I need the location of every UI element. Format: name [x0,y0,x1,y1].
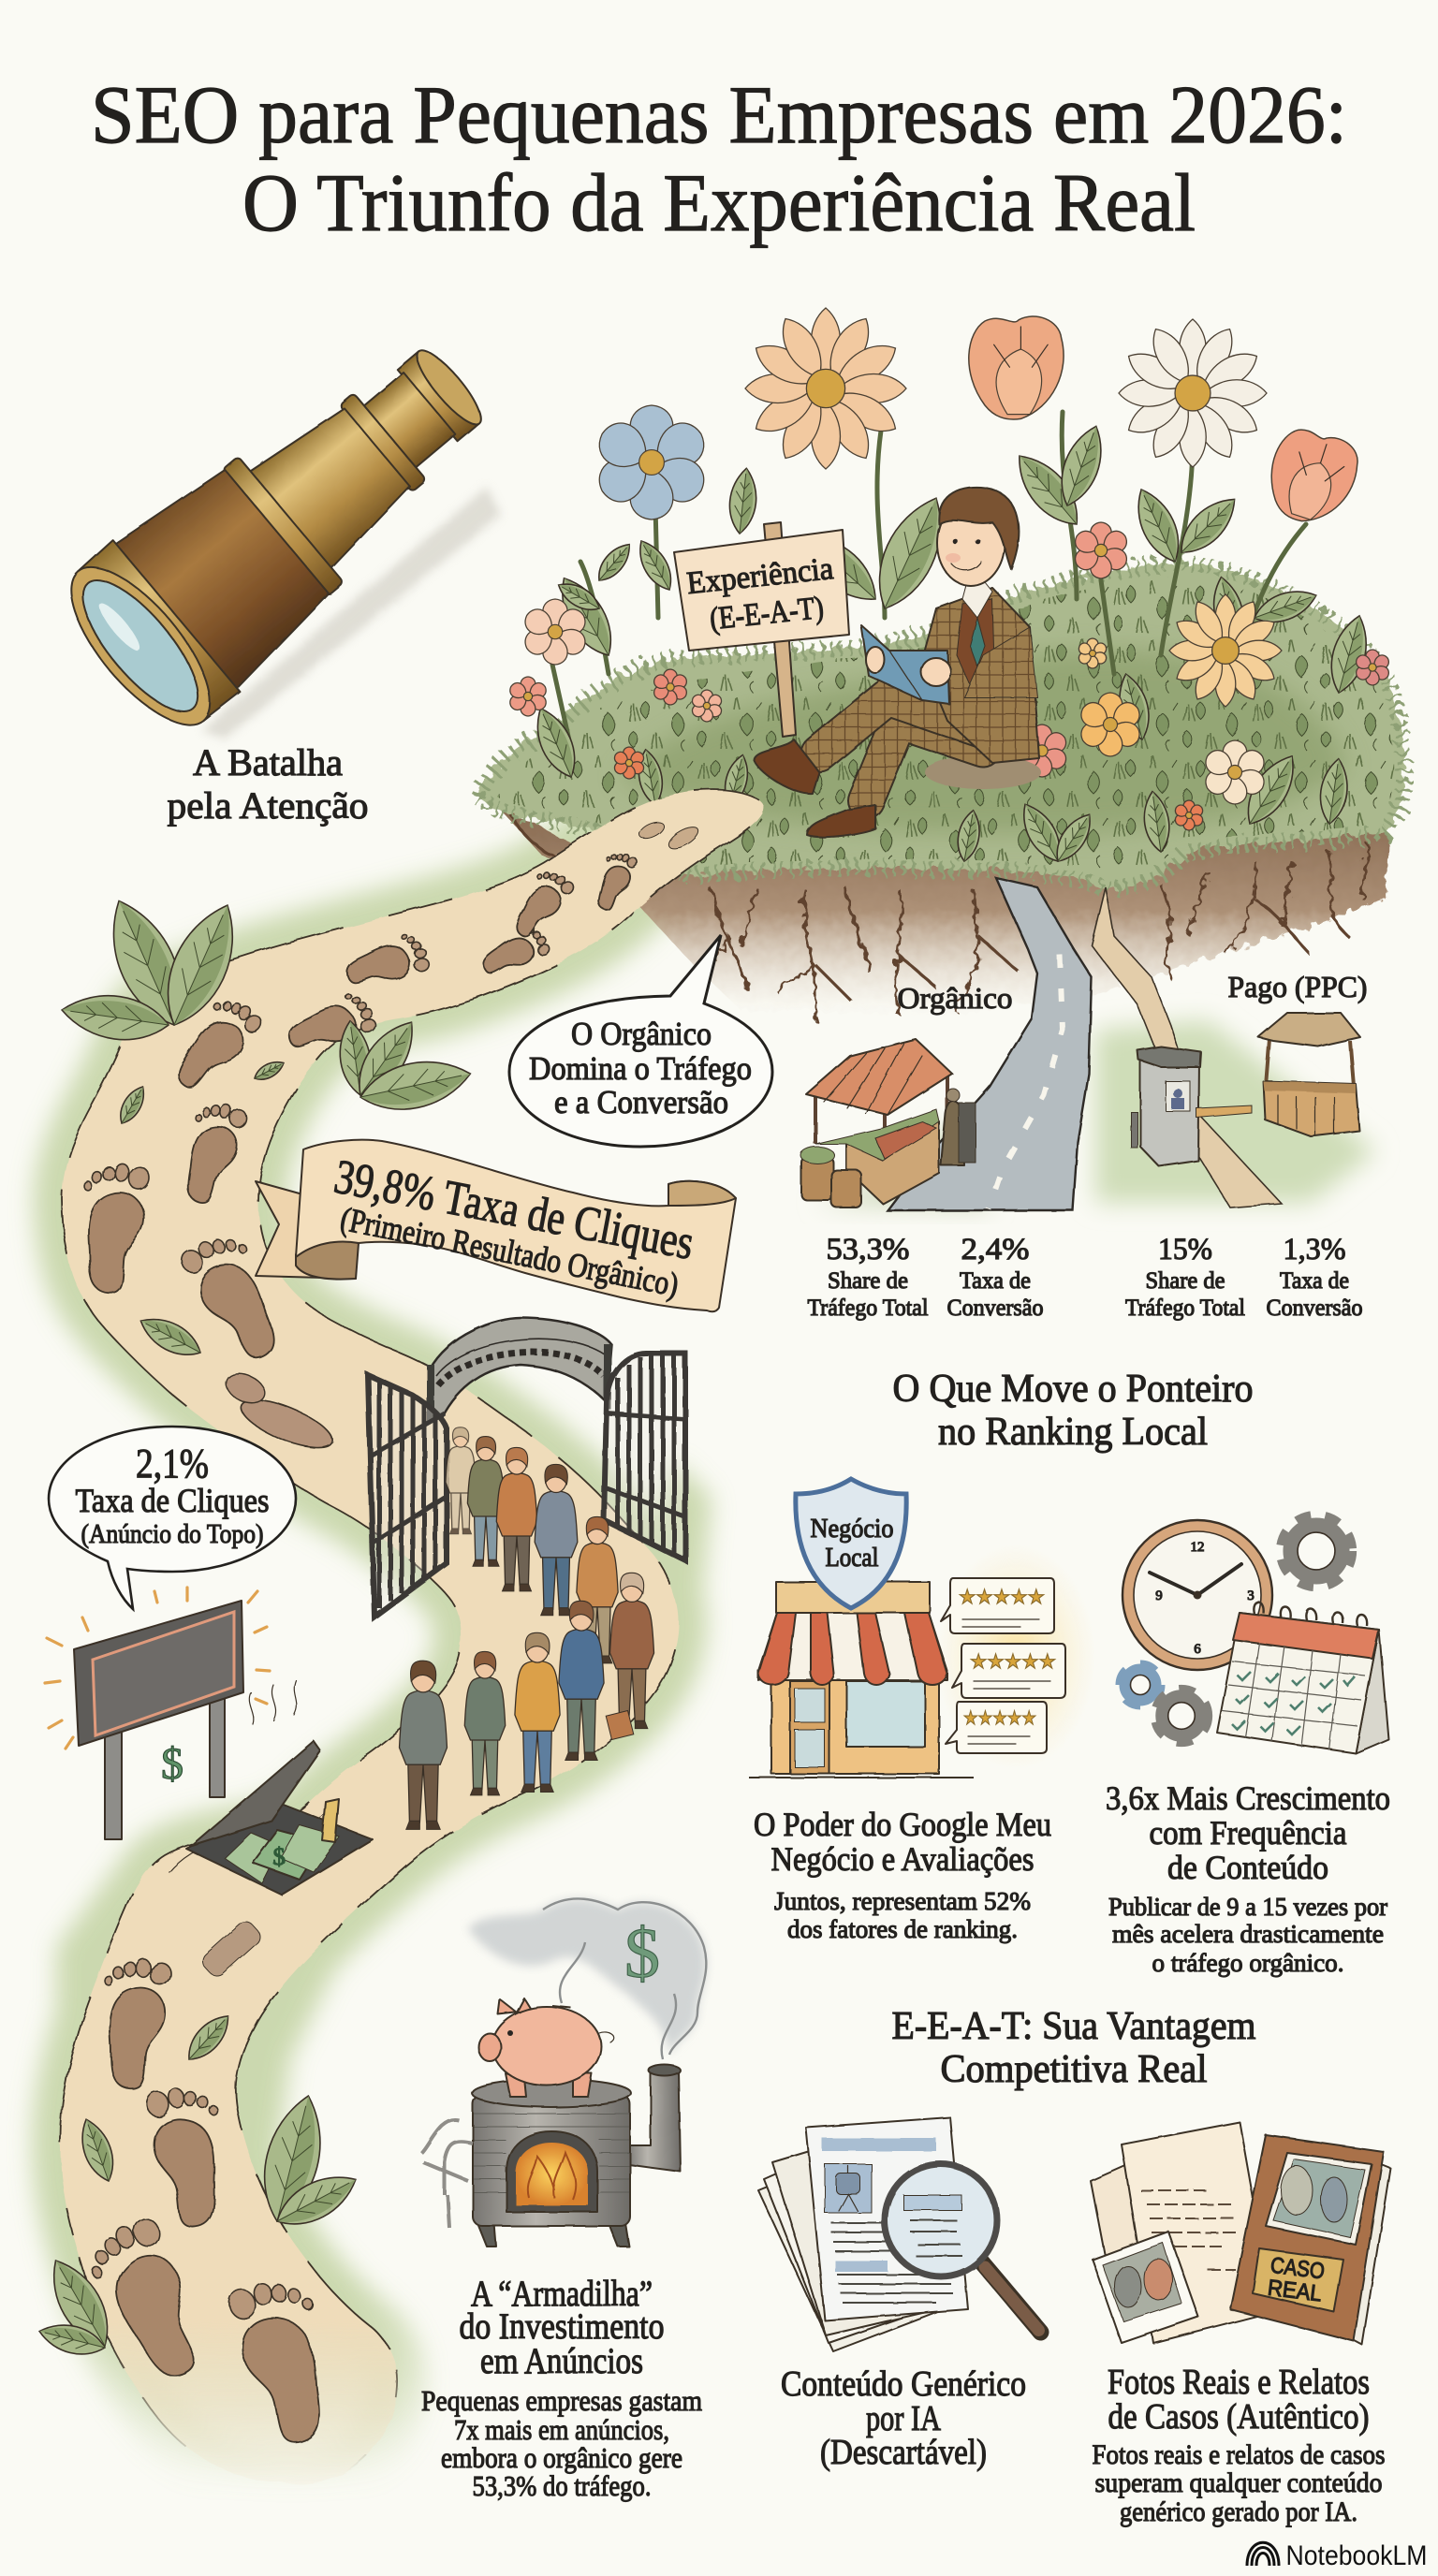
stat: 15%: 15% [1158,1233,1212,1266]
flowers [507,308,1391,830]
text: A "Armadilha" do Investimento: em Anúncios [480,2341,643,2381]
piggy bank [478,1998,614,2097]
stat: 2,4%: Conversão [947,1295,1043,1321]
text: Conteúdo Genérico por IA: (Descartável) [820,2433,987,2472]
ribbon banner: 39,8% [256,1140,736,1311]
heading: E-E-A-T [891,2005,1256,2091]
heading: O Que Move o Ponteiro: O Que Move o Ponteiro [893,1368,1253,1411]
heading: O Que Move o Ponteiro [893,1368,1253,1454]
stat: 53,3%: Share de [828,1268,908,1294]
text: O Poder do Google Meu: dos fatores de ranking. [787,1915,1018,1943]
icon: dollar in smoke: $ [624,1914,660,1993]
queue of people [400,1427,654,1829]
road comparison scene: organic vs paid [800,878,1376,1321]
plate text: CASO REAL [1266,2253,1326,2306]
text: Fotos Reais e Relatos [1092,2363,1386,2527]
text: O Poder do Google Meu [754,1806,1051,1943]
toll booth and barrier [1131,1046,1252,1166]
calendar [1217,1603,1388,1753]
clock: 6 [1194,1642,1201,1657]
soil and roots [496,805,1387,1020]
flowering hill with soil and roots [477,308,1404,1020]
text: 3,6x Mais Crescimento: mês acelera drasticamente [1112,1920,1384,1948]
clock [1123,1520,1272,1670]
text: A "Armadilha" do Investimento: do Investimento [459,2306,665,2347]
text: A "Armadilha" do Investimento: 7x mais em anúncios, [454,2413,669,2446]
review bubbles [941,1578,1065,1753]
text: Conteúdo Genérico por IA: Conteúdo Genérico [781,2364,1026,2404]
text: Fotos Reais e Relatos: superam qualquer conteúdo [1095,2467,1382,2498]
market stall [800,1039,976,1208]
clock: 12 [1191,1540,1204,1555]
text: A Batalha pela Atenção: pela Atenção [167,784,369,827]
speech bubble: 2,1% Taxa de Cliques: Taxa de Cliques [75,1482,270,1519]
text: A "Armadilha" do Investimento [421,2274,702,2502]
stat: 15%: Share de [1146,1268,1225,1294]
plate text: CASO REAL: CASO [1269,2253,1326,2284]
heading: E-E-A-T: E-E-A-T: Sua Vantagem [891,2005,1256,2048]
speech bubble: 2,1% Taxa de Cliques [49,1427,296,1609]
telescope illustration [47,302,522,747]
title [91,70,1347,249]
stat: 1,3% [1266,1233,1363,1321]
wooden stall [1258,1013,1360,1136]
ribbon banner: 39,8%: 39,8% Taxa de Cliques [330,1150,697,1270]
right door [604,1354,685,1560]
signpost: Experiência (E-E-A-T): (E-E-A-T) [708,591,826,637]
heading: O Que Move o Ponteiro: no Ranking Local [938,1411,1208,1454]
stat: 15% [1125,1233,1245,1321]
review bubbles: ★★★★★ [963,1708,1036,1729]
documents with magnifying glass [758,2117,1041,2351]
local shop with shield and reviews: Local [826,1544,879,1573]
text: A "Armadilha" do Investimento: embora o orgânico gere [441,2441,682,2474]
speech bubble: O Orgânico Domina: O Orgânico [571,1016,712,1052]
text: Conteúdo Genérico por IA: por IA [866,2399,941,2438]
text: Fotos Reais e Relatos: Fotos Reais e Relatos [1108,2363,1370,2402]
letters, photo and case album [1091,2122,1390,2345]
grass mound [477,562,1404,888]
review bubbles: ★★★★★ [970,1650,1056,1673]
stat: 53,3% [807,1233,929,1321]
stat: 1,3%: Conversão [1266,1295,1363,1321]
text: 3,6x Mais Crescimento: o tráfego orgânico. [1152,1949,1344,1977]
speech bubble: O Orgânico Domina [509,935,772,1147]
winding footpath [60,790,763,2484]
stat: 2,4% [947,1233,1043,1321]
review bubbles: ★★★★★ [959,1586,1045,1608]
man reading a book [754,487,1041,837]
ornate gate [368,1318,685,1617]
organic road [888,878,1092,1210]
text: 3,6x Mais Crescimento: 3,6x Mais Crescimento [1106,1779,1390,1817]
clock: 3 [1247,1588,1255,1603]
text: Fotos Reais e Relatos: de Casos (Autêntico) [1108,2397,1369,2437]
stat: 2,4%: Taxa de [960,1268,1031,1294]
signpost: Experiência (E-E-A-T): Experiência [685,551,835,601]
plants along the path [37,890,475,2361]
icon: dollar sign: $ [161,1739,183,1789]
label: Orgânico: Orgânico [897,981,1013,1015]
stat: 15%: Tráfego Total [1125,1295,1245,1321]
local shop with shield and reviews [749,1479,1095,1778]
text: Conteúdo Genérico por IA [781,2364,1026,2472]
text: A "Armadilha" do Investimento: 53,3% do tráfego. [472,2469,652,2502]
trapdoor with money: $ [273,1843,285,1870]
text: 3,6x Mais Crescimento: Publicar de 9 a 15 vezes por [1108,1893,1387,1921]
text: Fotos Reais e Relatos: Fotos reais e relatos de casos [1092,2439,1386,2470]
shop building [771,1671,939,1774]
signpost: Experiência (E-E-A-T) [674,522,849,737]
local shop with shield and reviews: Negócio [811,1515,893,1544]
text: 3,6x Mais Crescimento: com Frequência [1150,1814,1347,1852]
awning [758,1613,947,1680]
piggy bank on a burning furnace [421,1898,706,2247]
text: O Poder do Google Meu: O Poder do Google Meu [754,1806,1051,1843]
shield badge [796,1479,906,1608]
footprints [72,819,702,2451]
speech bubble: 2,1% Taxa de Cliques: (Anúncio do Topo) [81,1519,264,1549]
ribbon banner: 39,8%: (Primeiro Resultado Orgânico) [337,1200,682,1304]
trapdoor with money [186,1680,373,1895]
title: O Triunfo da Experiência Real [242,158,1196,249]
label: Pago (PPC): Pago (PPC) [1228,970,1367,1003]
flower stems and leaves [527,412,1374,868]
gears [1284,1518,1349,1584]
plate text: CASO REAL: REAL [1266,2276,1323,2306]
text: Fotos Reais e Relatos: genérico gerado por IA. [1120,2496,1357,2527]
stat: 53,3%: 53,3% [826,1233,910,1266]
text: O Poder do Google Meu: Juntos, representam 52% [774,1887,1031,1915]
text: O Poder do Google Meu: Negócio e Avaliações [771,1840,1034,1878]
text: A "Armadilha" do Investimento: A “Armadilha” [471,2274,653,2314]
stat: 1,3%: Taxa de [1280,1268,1349,1294]
clock: 9 [1155,1588,1163,1603]
grassy verge of the path [56,790,763,2484]
furnace [421,2065,681,2247]
speech bubble: 2,1% Taxa de Cliques: 2,1% [136,1441,209,1486]
stat: 2,4%: 2,4% [961,1233,1030,1266]
title: SEO para Pequenas Empresas em 2026: [91,70,1347,161]
stat: 1,3%: 1,3% [1283,1233,1346,1266]
speech bubble: O Orgânico Domina: e a Conversão [554,1084,728,1120]
left door [368,1375,447,1617]
speech bubble: O Orgânico Domina: Domina o Tráfego [529,1050,752,1087]
text: A Batalha pela Atenção [167,741,369,827]
dirt trail [1092,887,1282,1208]
clock, gears and calendar [1123,1518,1388,1753]
text: A "Armadilha" do Investimento: Pequenas empresas gastam [421,2384,702,2417]
stat: 53,3%: Tráfego Total [807,1295,929,1321]
text: 3,6x Mais Crescimento [1106,1779,1390,1977]
glowing billboard [45,1588,270,1839]
text: A Batalha pela Atenção: A Batalha [193,741,343,783]
text: 3,6x Mais Crescimento: de Conteúdo [1167,1849,1328,1886]
smoke cloud [468,1898,706,2055]
heading: E-E-A-T: Competitiva Real [940,2048,1208,2091]
